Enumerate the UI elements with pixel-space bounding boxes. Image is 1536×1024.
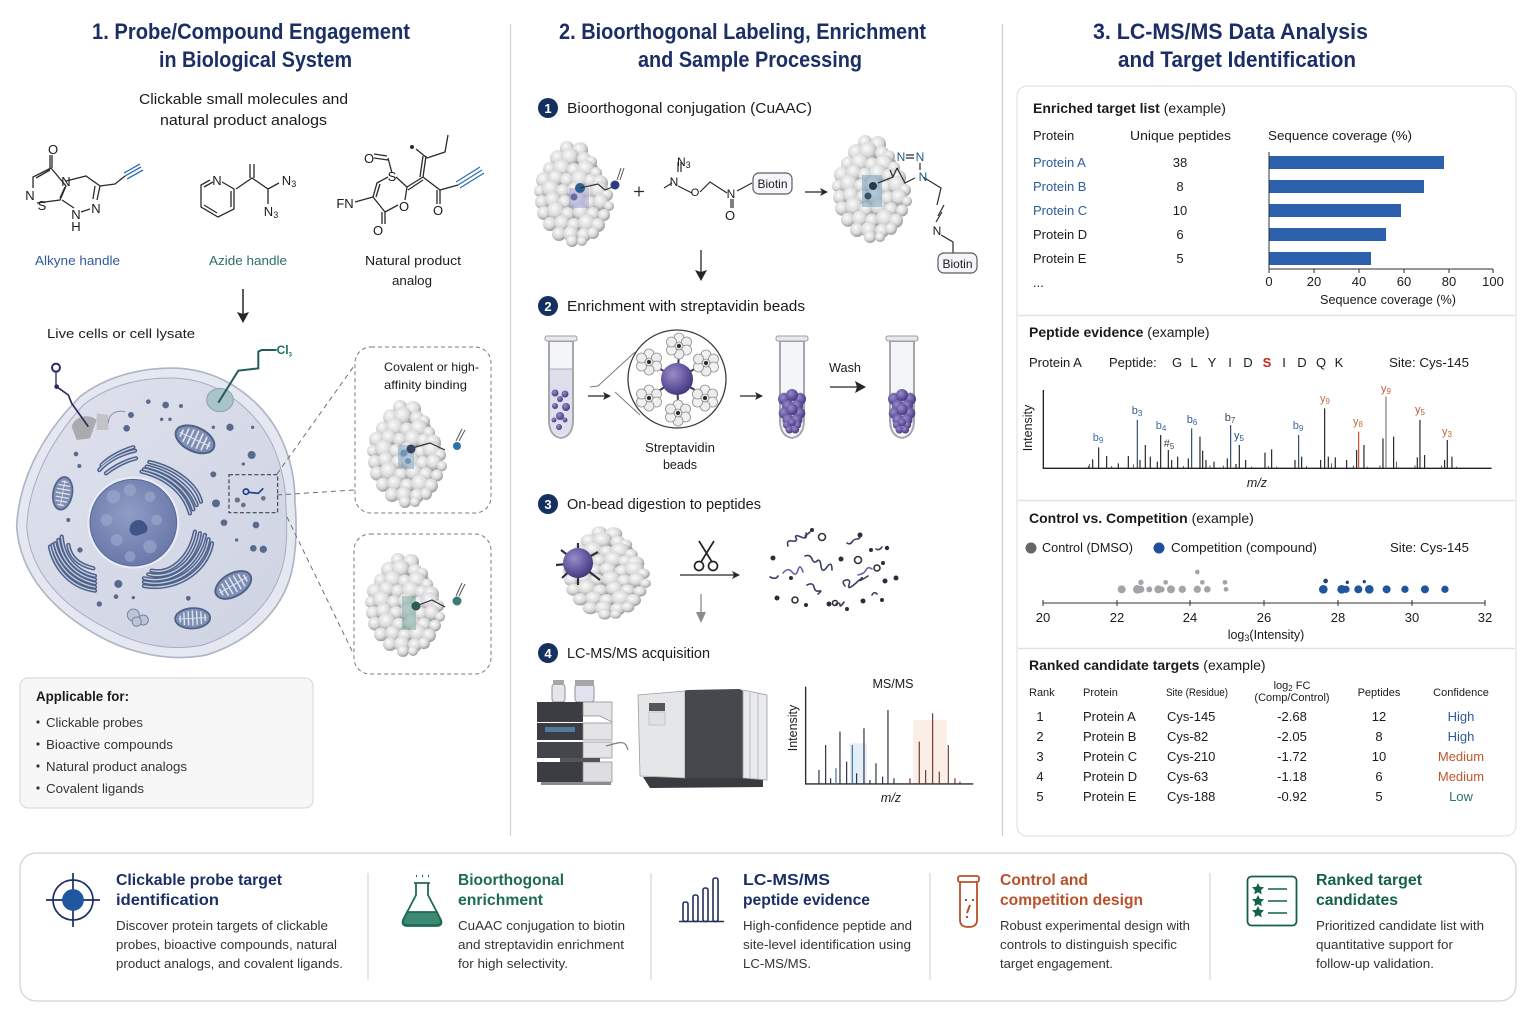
table: ranked candidate targets: FC <box>1293 680 1310 692</box>
step 1 heading: 1 <box>544 101 552 116</box>
chart: control versus competition: Control (DMSO) <box>1042 540 1133 555</box>
chart: peptide evidence spectrum: b <box>1093 432 1099 444</box>
label: azide handle: Azide handle <box>209 253 287 268</box>
arrow: molecules to cells <box>242 289 244 320</box>
table: ranked candidate targets: Site (Residue) <box>1166 687 1228 699</box>
illustration: conjugated protein with biotin: N <box>916 150 924 164</box>
table: ranked candidate targets: 4 <box>1036 769 1044 784</box>
chart: peptide evidence spectrum: 5 <box>1170 442 1175 451</box>
chart: control versus competition: 20 <box>1036 610 1050 625</box>
summary: ranked target candidates: follow-up validation. <box>1316 956 1434 971</box>
step 2 heading: 2 <box>544 299 552 314</box>
molecule: azide biotin reagent: O <box>691 187 700 199</box>
chart: peptide evidence spectrum: Peptide: <box>1109 355 1157 370</box>
chart: peptide evidence spectrum: S <box>1263 355 1272 370</box>
heading: section 1 <box>92 19 411 72</box>
table: ranked candidate targets: Protein A <box>1083 709 1136 724</box>
table and bar chart: enriched targets: 6 <box>1176 227 1184 242</box>
illustration: tube with captured beads <box>776 336 808 438</box>
table: ranked candidate targets <box>1029 657 1489 804</box>
table: ranked candidate targets: 2 <box>1036 729 1044 744</box>
illustration: LC stack <box>537 680 628 785</box>
summary: clickable probe target identification: Discover protein targets of clickable <box>116 918 328 933</box>
chart: control versus competition: (Intensity) <box>1249 628 1304 642</box>
table: ranked candidate targets: Protein D <box>1083 769 1137 784</box>
table and bar chart: enriched targets: 5 <box>1176 251 1184 266</box>
arrow: step 1 to 2 <box>700 250 702 278</box>
table and bar chart: enriched targets: 100 <box>1482 274 1504 289</box>
table: ranked candidate targets: Protein B <box>1083 729 1136 744</box>
summary: control and competition design: controls to distinguish specific <box>1000 937 1178 952</box>
table: ranked candidate targets: Protein C <box>1083 749 1137 764</box>
molecule: azide biotin reagent <box>664 155 792 223</box>
table and bar chart: enriched targets: Sequence coverage (%) <box>1320 292 1456 307</box>
chart: peptide evidence spectrum: D <box>1297 355 1307 370</box>
molecule: alkyne handle: H <box>71 219 81 234</box>
summary: ranked target candidates: Ranked target <box>1316 872 1423 889</box>
molecule: azide handle: 3 <box>273 210 278 220</box>
summary: ranked target candidates: candidates <box>1316 892 1398 909</box>
summary: bioorthogonal enrichment: enrichment <box>458 892 544 909</box>
chart: control versus competition: Site: Cys-145 <box>1390 540 1469 555</box>
chart: peptide evidence spectrum: 9 <box>1099 436 1104 445</box>
step 1 heading: Bioorthogonal conjugation (CuAAC) <box>567 100 812 117</box>
heading: section 3 <box>1093 19 1368 72</box>
table: ranked candidate targets: Ranked candidate targets (example) <box>1029 657 1266 673</box>
summary: LC-MS/MS peptide evidence: peptide evidence <box>743 892 870 909</box>
heading: section 2 <box>559 19 927 72</box>
summary: ranked target candidates: quantitative support for <box>1316 937 1454 952</box>
chart: peptide evidence spectrum: I <box>1282 355 1286 370</box>
summary: bioorthogonal enrichment <box>458 872 625 971</box>
summary: bioorthogonal enrichment: and streptavidin enrichment <box>458 937 624 952</box>
summary: LC-MS/MS peptide evidence: High-confidence peptide and <box>743 918 912 933</box>
table: ranked candidate targets: -2.68 <box>1277 709 1307 724</box>
table and bar chart: enriched targets: Protein D <box>1033 227 1087 242</box>
illustration: conjugated protein with biotin: N <box>897 150 905 164</box>
molecule: natural product analog: FN <box>336 196 354 211</box>
table: ranked candidate targets: -1.18 <box>1277 769 1307 784</box>
table: ranked candidate targets: Peptides <box>1358 687 1401 699</box>
table: ranked candidate targets: Protein <box>1083 687 1118 699</box>
illustration: streptavidin bead <box>628 330 726 428</box>
subheading: clickable molecules: Clickable small molecules and <box>139 91 348 108</box>
table: ranked candidate targets: High <box>1448 729 1474 744</box>
summary: ranked target candidates <box>1316 872 1484 971</box>
chart: peptide evidence spectrum: b <box>1293 420 1299 432</box>
plus sign <box>634 186 644 196</box>
molecule: alkyne handle: O <box>48 142 58 157</box>
panel: applicable for <box>20 678 313 808</box>
summary: clickable probe target identification: Clickable probe target <box>116 872 283 889</box>
label: live cells: Live cells or cell lysate <box>47 326 195 341</box>
table and bar chart: enriched targets: Enriched target list (example) <box>1033 100 1226 116</box>
arrow: step 3 to 4 <box>700 594 702 620</box>
chart: peptide evidence spectrum: 9 <box>1299 424 1304 433</box>
molecule: azide handle <box>201 164 296 220</box>
chart: control versus competition: log <box>1228 628 1244 642</box>
illustration: mass spectrometer <box>638 689 767 788</box>
heading: section 3: 3. LC-MS/MS Data Analysis <box>1093 19 1368 44</box>
label: natural product analog: Natural product <box>365 253 461 268</box>
chart: peptide evidence spectrum: b <box>1132 405 1138 417</box>
table and bar chart: enriched targets: 80 <box>1442 274 1456 289</box>
table and bar chart: enriched targets: 20 <box>1307 274 1321 289</box>
chart: peptide evidence spectrum: b <box>1156 420 1162 432</box>
chart: peptide evidence spectrum: # <box>1164 438 1170 450</box>
callout: covalent binding <box>355 347 491 513</box>
heading: section 1: in Biological System <box>159 47 352 72</box>
chart: peptide evidence spectrum <box>1021 324 1492 490</box>
chart: peptide evidence spectrum: 4 <box>1162 424 1167 433</box>
molecule: alkyne handle: N <box>91 201 101 216</box>
summary: control and competition design: Robust experimental design with <box>1000 918 1190 933</box>
table: ranked candidate targets: Cys-145 <box>1167 709 1215 724</box>
chart: peptide evidence spectrum: Q <box>1316 355 1326 370</box>
summary: bioorthogonal enrichment: for high selectivity. <box>458 956 568 971</box>
table: ranked candidate targets: 12 <box>1372 709 1386 724</box>
heading: section 3: and Target Identification <box>1118 47 1356 72</box>
chart: peptide evidence spectrum: 3 <box>1138 409 1143 418</box>
summary: bioorthogonal enrichment: CuAAC conjugation to biotin <box>458 918 625 933</box>
illustration: cell: Cl <box>277 343 289 357</box>
subheading: clickable molecules <box>139 91 348 129</box>
chart: control versus competition: Control vs. Competition (example) <box>1029 510 1254 526</box>
heading: section 1: 1. Probe/Compound Engagement <box>92 19 411 44</box>
table: ranked candidate targets: Medium <box>1438 749 1484 764</box>
chart: control versus competition: 24 <box>1183 610 1197 625</box>
step 2 heading: Enrichment with streptavidin beads <box>567 298 805 315</box>
molecule: natural product analog: O <box>433 203 443 218</box>
panel: probe and compound engagement <box>17 19 491 808</box>
label: streptavidin beads: Streptavidin <box>645 441 715 455</box>
label: natural product analog: analog <box>392 273 432 288</box>
label and arrow: wash: Wash <box>829 360 861 375</box>
summary: LC-MS/MS peptide evidence: site-level identification using <box>743 937 911 952</box>
icon: target <box>46 873 100 927</box>
connector: dashed zoom lines <box>277 366 354 655</box>
chart: control versus competition: 22 <box>1110 610 1124 625</box>
chart: peptide evidence spectrum: 5 <box>1421 408 1426 417</box>
chart: peptide evidence spectrum: Y <box>1208 355 1217 370</box>
table and bar chart: enriched targets: Protein E <box>1033 251 1087 266</box>
illustration: conjugated protein with biotin: N <box>919 170 927 184</box>
panel: applicable for: Covalent ligands <box>46 781 145 796</box>
molecule: azide biotin reagent: Biotin <box>757 177 788 191</box>
chart: peptide evidence spectrum: b <box>1187 414 1193 426</box>
table: ranked candidate targets: Medium <box>1438 769 1484 784</box>
molecule: azide biotin reagent: N <box>670 175 678 189</box>
icon: scissors <box>694 541 718 570</box>
chart: peptide evidence spectrum: 7 <box>1231 416 1236 425</box>
chart: peptide evidence spectrum: b <box>1225 412 1231 424</box>
chart: peptide evidence spectrum: y <box>1353 416 1359 428</box>
table: ranked candidate targets: -0.92 <box>1277 789 1307 804</box>
summary: clickable probe target identification: probes, bioactive compounds, natural <box>116 937 337 952</box>
illustration: conjugated protein with biotin: N <box>933 224 941 238</box>
chart: peptide evidence spectrum: Site: Cys-145 <box>1389 355 1469 370</box>
illustration: peptides <box>770 528 898 611</box>
table and bar chart: enriched targets: Protein B <box>1033 179 1086 194</box>
illustration: bead bound to protein <box>556 526 651 620</box>
table and bar chart: enriched targets: Unique peptides <box>1130 128 1232 143</box>
chart: peptide evidence spectrum: y <box>1442 426 1448 438</box>
chart: control versus competition: 28 <box>1331 610 1345 625</box>
arrow: digestion <box>680 574 738 576</box>
summary: LC-MS/MS peptide evidence: LC-MS/MS. <box>743 956 811 971</box>
table: ranked candidate targets: Low <box>1449 789 1474 804</box>
chart: peptide evidence spectrum: L <box>1190 355 1198 370</box>
table and bar chart: enriched targets <box>1033 100 1504 307</box>
table and bar chart: enriched targets: Sequence coverage (%) <box>1268 128 1412 143</box>
summary: clickable probe target identification: identification <box>116 892 219 909</box>
chart: peptide evidence spectrum: 3 <box>1448 430 1453 439</box>
molecule: azide handle: N <box>282 173 291 188</box>
chart: peptide evidence spectrum: 6 <box>1193 418 1198 427</box>
step 4 heading: 4 <box>544 646 552 661</box>
panel: summary strip <box>20 853 1516 1001</box>
summary: clickable probe target identification: product analogs, and covalent ligands. <box>116 956 343 971</box>
table: ranked candidate targets: Rank <box>1029 687 1055 699</box>
table and bar chart: enriched targets: ... <box>1033 275 1044 290</box>
molecule: natural product analog <box>336 135 484 238</box>
subheading: clickable molecules: natural product analogs <box>160 112 327 129</box>
chart: peptide evidence spectrum: y <box>1381 383 1387 395</box>
chart: peptide evidence spectrum: m/z <box>1247 476 1268 490</box>
chart: peptide evidence spectrum: Peptide evidence (example) <box>1029 324 1210 340</box>
chart: control versus competition: 3 <box>1244 633 1249 643</box>
molecule: alkyne handle: N <box>25 188 35 203</box>
table and bar chart: enriched targets: Protein C <box>1033 203 1087 218</box>
table: ranked candidate targets: Cys-188 <box>1167 789 1215 804</box>
chart: control versus competition: 26 <box>1257 610 1271 625</box>
molecule: alkyne handle: N <box>71 207 81 222</box>
callout: binding detail <box>354 534 491 674</box>
molecule: alkyne handle: S <box>38 198 47 213</box>
chart: peptide evidence spectrum: y <box>1320 393 1326 405</box>
molecule: natural product analog: O <box>373 223 383 238</box>
table and bar chart: enriched targets: Protein A <box>1033 155 1086 170</box>
table: ranked candidate targets: Cys-210 <box>1167 749 1215 764</box>
table: ranked candidate targets: log <box>1274 680 1288 692</box>
illustration: conjugated protein with biotin: Biotin <box>942 257 973 271</box>
molecule: azide biotin reagent: N <box>677 155 686 169</box>
chart: peptide evidence spectrum: 8 <box>1359 420 1364 429</box>
illustration: protein with probe <box>534 141 624 247</box>
chart: peptide evidence spectrum: Protein A <box>1029 355 1082 370</box>
table: ranked candidate targets: Protein E <box>1083 789 1137 804</box>
step 3 heading: On-bead digestion to peptides <box>567 496 761 513</box>
icon: flask <box>403 876 441 926</box>
panel: applicable for: Bioactive compounds <box>46 737 174 752</box>
illustration: washed tube <box>886 336 918 438</box>
molecule: azide handle: N <box>212 173 222 188</box>
table: ranked candidate targets: 1 <box>1036 709 1044 724</box>
label: streptavidin beads <box>645 441 715 472</box>
heading: section 2: 2. Bioorthogonal Labeling, Enrichment <box>559 19 927 44</box>
table: ranked candidate targets: 10 <box>1372 749 1386 764</box>
table and bar chart: enriched targets: 8 <box>1176 179 1184 194</box>
summary: control and competition design: competition design <box>1000 892 1143 909</box>
table: ranked candidate targets: Cys-63 <box>1167 769 1208 784</box>
table: ranked candidate targets: (Comp/Control) <box>1254 692 1330 704</box>
molecule: azide handle: 3 <box>291 179 296 189</box>
molecule: natural product analog: O <box>399 199 409 214</box>
label and arrow: wash <box>829 360 863 387</box>
summary: clickable probe target identification <box>116 872 343 971</box>
chart: peptide evidence spectrum: D <box>1243 355 1253 370</box>
molecule: azide biotin reagent: O <box>725 208 735 223</box>
illustration: conjugated protein with biotin <box>832 135 977 273</box>
table and bar chart: enriched targets: 38 <box>1173 155 1187 170</box>
callout: covalent binding: affinity binding <box>384 378 467 392</box>
table: ranked candidate targets: 5 <box>1036 789 1044 804</box>
table: ranked candidate targets: -2.05 <box>1277 729 1307 744</box>
summary: ranked target candidates: Prioritized candidate list with <box>1316 918 1484 933</box>
label: streptavidin beads: beads <box>663 458 697 472</box>
chart: control versus competition <box>1026 510 1492 643</box>
panel: bioorthogonal labeling and enrichment <box>534 19 977 805</box>
table: ranked candidate targets: High <box>1448 709 1474 724</box>
table: ranked candidate targets: Cys-82 <box>1167 729 1208 744</box>
molecule: alkyne handle: N <box>61 174 71 189</box>
molecule: azide biotin reagent: N <box>727 187 735 201</box>
illustration: cell: 3 <box>289 353 293 359</box>
chart: MS/MS spectrum: m/z <box>881 791 902 805</box>
chart: peptide evidence spectrum: I <box>1228 355 1232 370</box>
heading: section 2: and Sample Processing <box>638 47 862 72</box>
chart: peptide evidence spectrum: G <box>1172 355 1182 370</box>
table and bar chart: enriched targets: 40 <box>1352 274 1366 289</box>
icon: checklist <box>1248 876 1296 926</box>
molecule: alkyne handle <box>25 142 143 234</box>
panel: applicable for: Natural product analogs <box>46 759 188 774</box>
step 3 heading: 3 <box>544 497 552 512</box>
table: ranked candidate targets: 6 <box>1375 769 1383 784</box>
chart: MS/MS spectrum: Intensity <box>786 704 800 751</box>
summary: control and competition design: target engagement. <box>1000 956 1113 971</box>
panel: applicable for: Clickable probes <box>46 715 143 730</box>
table and bar chart: enriched targets: Protein <box>1033 128 1074 143</box>
molecule: natural product analog: S <box>388 169 397 184</box>
illustration: tube with beads <box>545 336 577 438</box>
chart: control versus competition: 32 <box>1478 610 1492 625</box>
table and bar chart: enriched targets: 0 <box>1265 274 1273 289</box>
label: natural product analog <box>365 253 461 288</box>
chart: peptide evidence spectrum: 9 <box>1326 397 1331 406</box>
illustration: cell <box>17 343 296 657</box>
molecule: azide biotin reagent: 3 <box>686 160 691 170</box>
molecule: natural product analog: O <box>364 151 374 166</box>
summary: bioorthogonal enrichment: Bioorthogonal <box>458 872 564 889</box>
chart: MS/MS spectrum: MS/MS <box>873 677 913 691</box>
table: ranked candidate targets: Confidence <box>1433 687 1489 699</box>
chart: peptide evidence spectrum: y <box>1234 430 1240 442</box>
chart: peptide evidence spectrum: 9 <box>1387 387 1392 396</box>
table: ranked candidate targets: 3 <box>1036 749 1044 764</box>
panel: data analysis <box>1017 19 1516 836</box>
step 4 heading: LC-MS/MS acquisition <box>567 645 710 662</box>
table and bar chart: enriched targets: 10 <box>1173 203 1187 218</box>
arrow: to bound tube <box>740 395 761 397</box>
summary: LC-MS/MS peptide evidence: LC-MS/MS <box>743 872 830 889</box>
chart: peptide evidence spectrum: Intensity <box>1021 404 1035 451</box>
table: ranked candidate targets: -1.72 <box>1277 749 1307 764</box>
summary: LC-MS/MS peptide evidence <box>743 872 912 971</box>
chart: peptide evidence spectrum: K <box>1335 355 1344 370</box>
label: alkyne handle: Alkyne handle <box>35 253 120 268</box>
icon: bar chart <box>679 878 724 922</box>
summary: control and competition design <box>1000 872 1190 971</box>
step 4 heading <box>538 643 710 663</box>
chart: control versus competition: 30 <box>1405 610 1419 625</box>
chart: control versus competition: Competition (compound) <box>1171 540 1317 555</box>
table and bar chart: enriched targets: 60 <box>1397 274 1411 289</box>
callout: covalent binding: Covalent or high- <box>384 360 479 374</box>
arrow: conjugation <box>805 191 826 193</box>
table: ranked candidate targets: 5 <box>1375 789 1383 804</box>
panel: applicable for: Applicable for: <box>36 688 129 704</box>
table: ranked candidate targets: 8 <box>1375 729 1383 744</box>
chart: MS/MS spectrum <box>786 677 973 805</box>
icon: test tube <box>958 876 979 927</box>
table: ranked candidate targets: 2 <box>1288 684 1293 693</box>
arrow: tube to beads with zoom lines <box>588 352 640 415</box>
chart: peptide evidence spectrum: 5 <box>1240 434 1245 443</box>
chart: peptide evidence spectrum: y <box>1415 404 1421 416</box>
molecule: azide handle: N <box>264 204 273 219</box>
summary: control and competition design: Control and <box>1000 872 1088 889</box>
